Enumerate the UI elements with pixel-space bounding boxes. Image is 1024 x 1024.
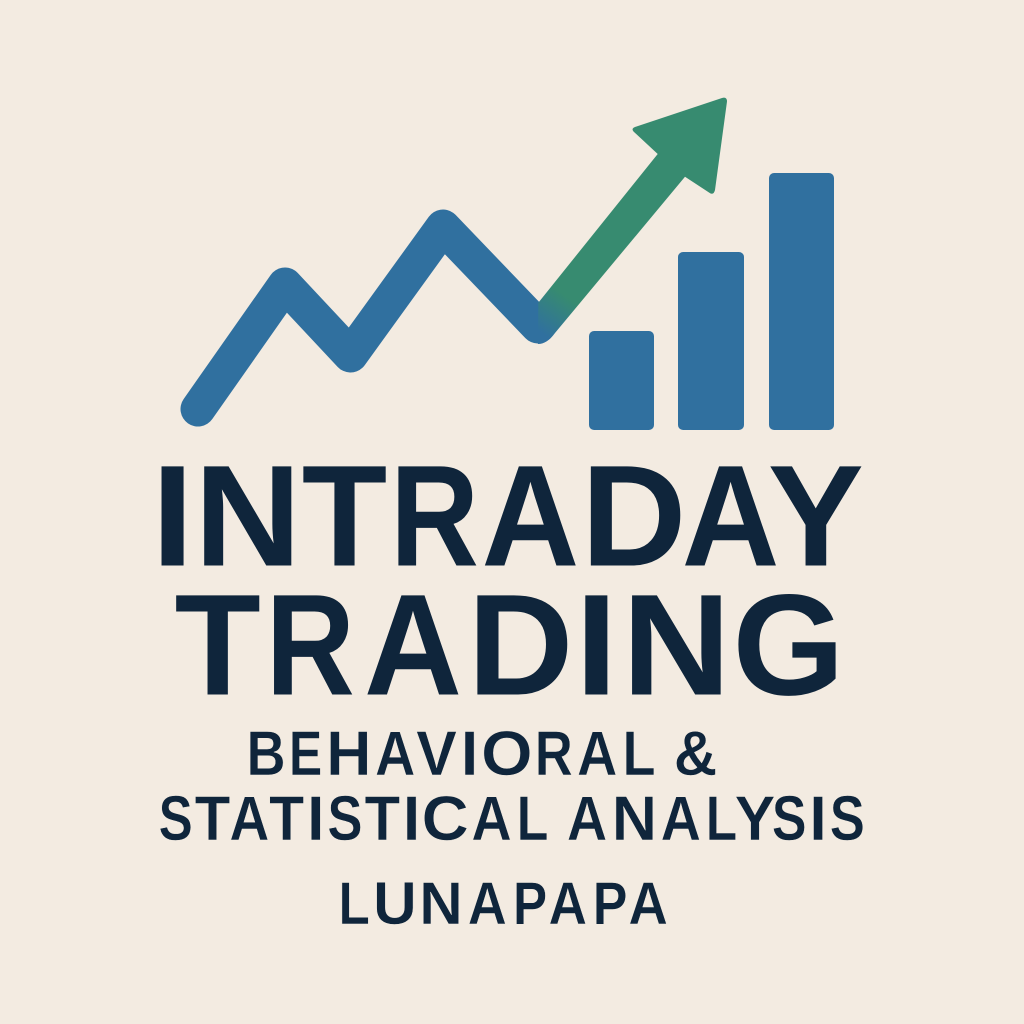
subtitle line 1: B bbox=[246, 719, 286, 789]
subtitle line 1: A bbox=[577, 719, 617, 789]
bar 3 bbox=[769, 173, 834, 430]
subtitle line 2: A bbox=[661, 784, 701, 854]
title line 2: I bbox=[575, 564, 618, 726]
chart logo bbox=[198, 98, 834, 430]
title line 2: N bbox=[622, 564, 731, 726]
author name: P bbox=[593, 869, 628, 937]
title line 1: A bbox=[682, 436, 780, 596]
subtitle line 2: L bbox=[517, 784, 548, 854]
title line 2: T bbox=[175, 564, 261, 726]
author name: L bbox=[338, 869, 370, 937]
title line 1: N bbox=[194, 436, 301, 596]
subtitle line 1: A bbox=[375, 719, 415, 789]
subtitle line 2: S bbox=[772, 784, 807, 854]
subtitle line 2: A bbox=[567, 784, 607, 854]
author name: A bbox=[468, 869, 507, 937]
title line 1: D bbox=[581, 436, 686, 596]
subtitle line 2: S bbox=[830, 784, 865, 854]
subtitle line 2: A bbox=[471, 784, 512, 854]
author name: U bbox=[373, 869, 417, 937]
subtitle line 2: S bbox=[159, 784, 193, 854]
title line 2: G bbox=[732, 564, 844, 726]
subtitle line 2: Y bbox=[735, 784, 775, 854]
title line 2: A bbox=[364, 564, 462, 726]
title line 1: T bbox=[302, 436, 387, 596]
subtitle line 2: I bbox=[809, 784, 827, 854]
subtitle line 2: I bbox=[403, 784, 420, 854]
subtitle line 2: C bbox=[422, 784, 469, 854]
subtitle line 2: A bbox=[229, 784, 269, 854]
subtitle line 1: R bbox=[535, 719, 573, 789]
subtitle line 1: E bbox=[289, 719, 322, 789]
subtitle line 2: I bbox=[307, 784, 325, 854]
subtitle line 1: & bbox=[674, 719, 717, 789]
title line 1: Y bbox=[768, 436, 864, 596]
subtitle line 2: T bbox=[195, 784, 230, 854]
author name: N bbox=[419, 869, 463, 937]
bar 2 bbox=[678, 252, 744, 430]
author name: A bbox=[628, 869, 668, 937]
subtitle line 2: T bbox=[269, 784, 304, 854]
title line 1: I bbox=[151, 436, 194, 596]
title line 2: R bbox=[266, 564, 355, 726]
subtitle line 1: I bbox=[461, 719, 478, 789]
subtitle line 1: V bbox=[416, 719, 457, 789]
bar 1 bbox=[589, 331, 654, 430]
title line 1: R bbox=[390, 436, 479, 596]
subtitle line 1: L bbox=[622, 719, 655, 789]
subtitle line 1: H bbox=[326, 719, 371, 789]
subtitle line 2: T bbox=[365, 784, 400, 854]
author name: P bbox=[513, 869, 547, 937]
title line 1: A bbox=[482, 436, 579, 596]
subtitle line 1: O bbox=[481, 719, 532, 789]
subtitle line 2: L bbox=[706, 784, 737, 854]
subtitle line 2: S bbox=[327, 784, 363, 854]
icon: green arrow bbox=[538, 98, 727, 344]
title line 2: D bbox=[468, 564, 573, 726]
author name: A bbox=[548, 869, 587, 937]
subtitle line 2: N bbox=[612, 784, 657, 854]
icon: rising line bbox=[198, 227, 538, 409]
